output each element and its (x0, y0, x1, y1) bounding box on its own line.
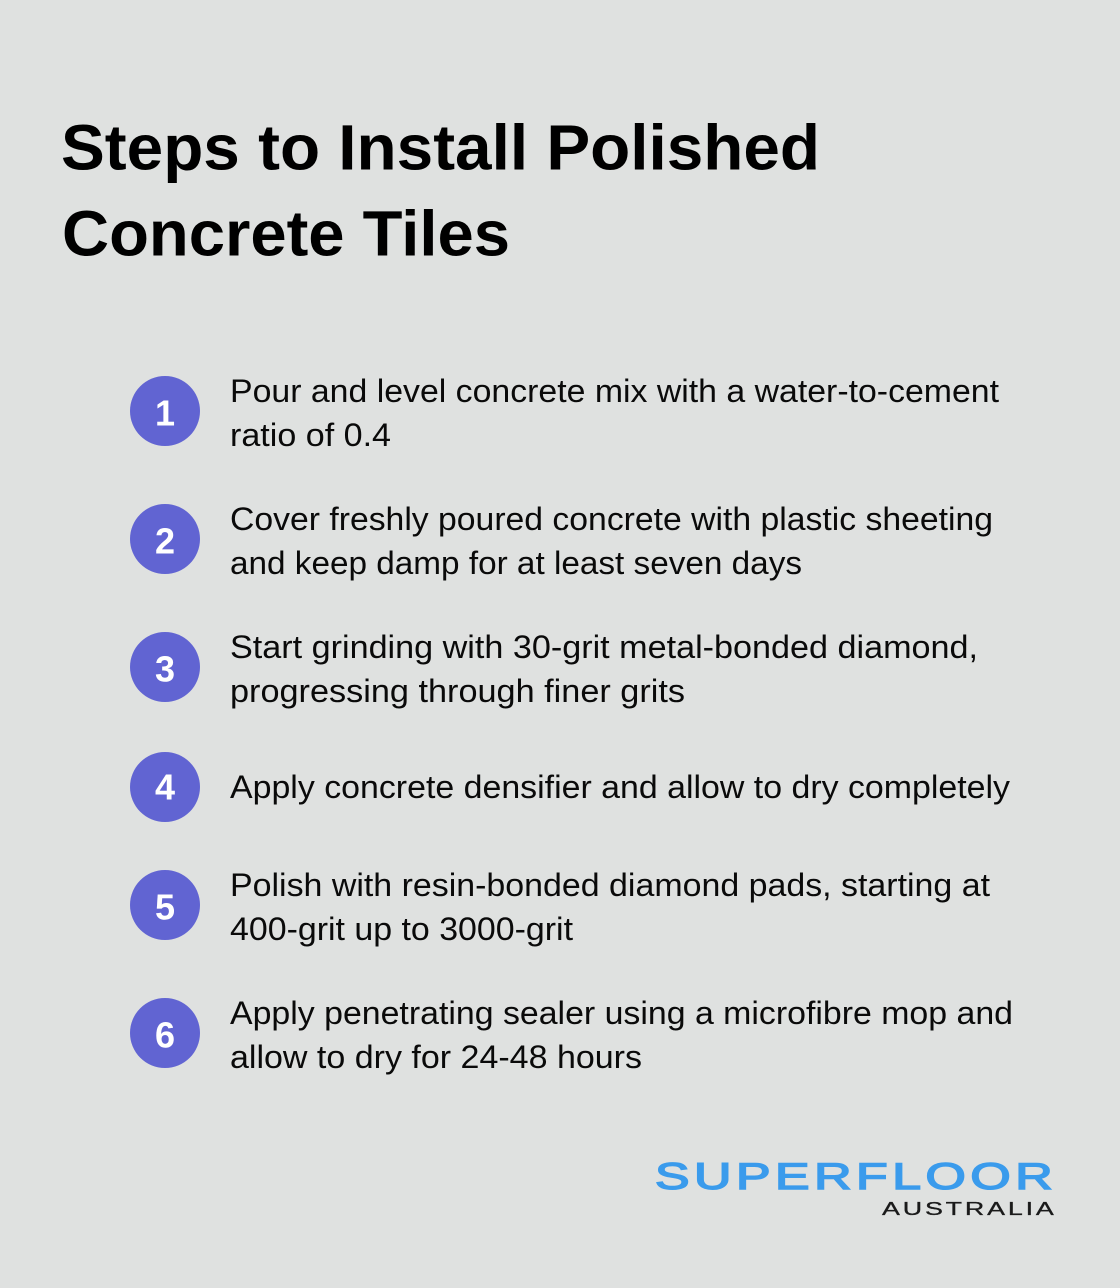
step 4 text: Apply concrete densifier and allow to dry completely (230, 769, 1010, 805)
step 2 (130, 501, 993, 581)
step 3 text (230, 629, 978, 709)
title: Steps to Install Polished (61, 112, 820, 184)
step 2 text (230, 501, 993, 581)
number badge 5: 5 (155, 886, 175, 928)
number badge 2 (130, 504, 200, 574)
step 1 text (230, 373, 999, 453)
title: Concrete Tiles (62, 198, 510, 270)
step 5 (130, 867, 990, 947)
step 1 text: Pour and level concrete mix with a water-to-cement (230, 373, 999, 409)
step 1 text: ratio of 0.4 (230, 417, 391, 453)
step 6 text (230, 995, 1013, 1075)
title (61, 112, 820, 270)
step 3 (130, 629, 978, 709)
step 1 (130, 373, 999, 453)
step 4 (130, 752, 1010, 822)
number badge 1 (130, 376, 200, 446)
number badge 1: 1 (155, 392, 175, 434)
step 3 text: Start grinding with 30-grit metal-bonded diamond, (230, 629, 978, 665)
number badge 4: 4 (155, 766, 175, 808)
number badge 4 (130, 752, 200, 822)
step 6 (130, 995, 1013, 1075)
step 5 text: Polish with resin-bonded diamond pads, starting at (230, 867, 990, 903)
step 6 text: allow to dry for 24-48 hours (230, 1039, 642, 1075)
number badge 6 (130, 998, 200, 1068)
step 2 text: Cover freshly poured concrete with plastic sheeting (230, 501, 993, 537)
step 5 text (230, 867, 990, 947)
logo: Superfloor Australia (655, 1155, 1055, 1219)
logo: Superfloor Australia: SUPERFLOOR (655, 1155, 1053, 1197)
number badge 5 (130, 870, 200, 940)
number badge 2: 2 (155, 520, 175, 562)
number badge 3: 3 (155, 648, 175, 690)
logo: Superfloor Australia: AUSTRALIA (882, 1198, 1055, 1219)
step 6 text: Apply penetrating sealer using a microfibre mop and (230, 995, 1013, 1031)
step 2 text: and keep damp for at least seven days (230, 545, 802, 581)
step 5 text: 400-grit up to 3000-grit (230, 911, 573, 947)
number badge 3 (130, 632, 200, 702)
number badge 6: 6 (155, 1014, 175, 1056)
step 3 text: progressing through finer grits (230, 673, 685, 709)
